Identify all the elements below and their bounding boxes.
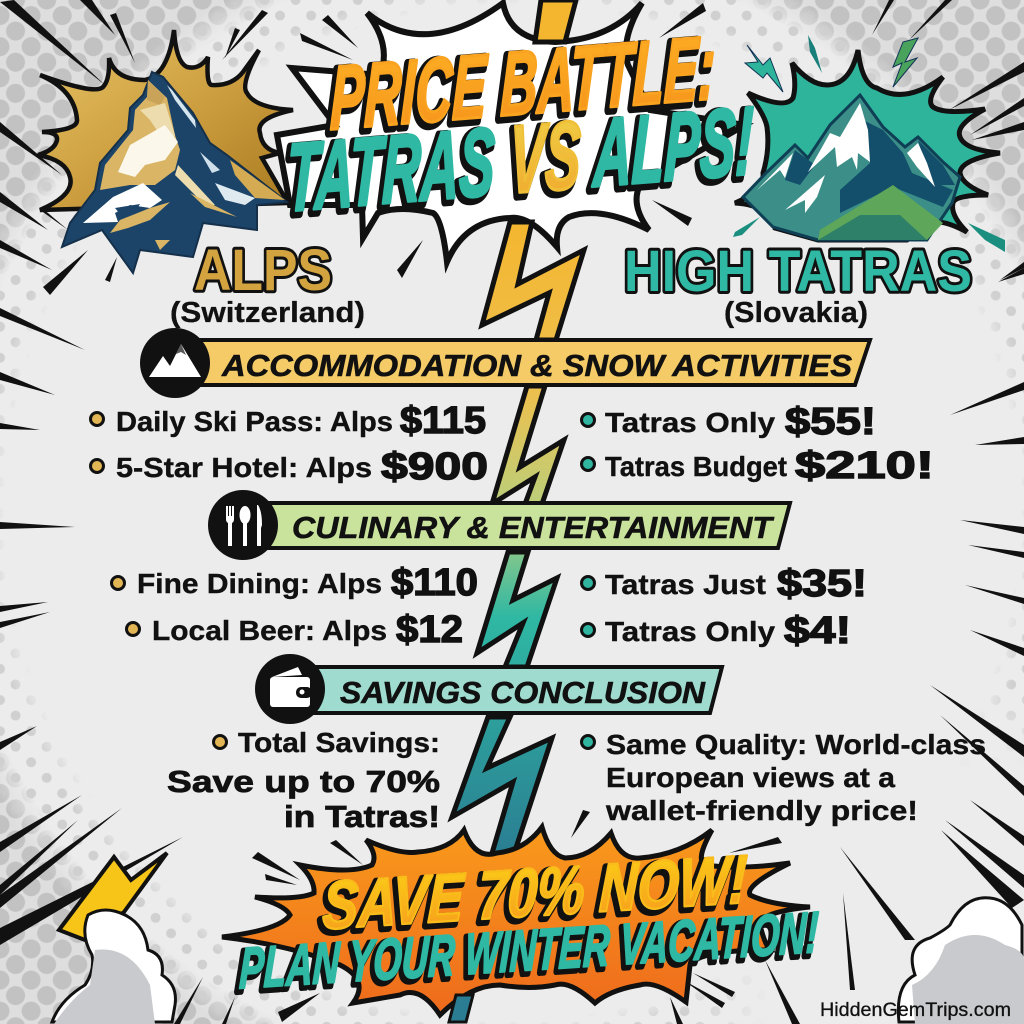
- icon: wallet: [270, 667, 312, 707]
- panel: accommodation prices: Tatras Budget: [605, 451, 787, 482]
- central lightning bolt: [452, 0, 584, 860]
- panel: savings text Alps side: [167, 727, 440, 834]
- banner: savings conclusion: SAVINGS CONCLUSION: [340, 675, 706, 710]
- panel: savings text Alps side: Save up to 70%: [167, 764, 440, 799]
- call to action text: SAVE 70% NOW!: [318, 844, 745, 947]
- panel: call-to-action burst: [222, 827, 810, 1022]
- call to action text: SAVE 70% NOW!: [321, 841, 749, 944]
- panel: culinary prices: $110: [391, 562, 478, 604]
- panel: accommodation prices: $210!: [795, 445, 934, 487]
- heading: High Tatras: [624, 239, 972, 329]
- banner: savings conclusion: [255, 654, 722, 724]
- title: [282, 14, 756, 235]
- panel: culinary prices: $35!: [777, 563, 867, 605]
- panel: savings text Tatras side: wallet-friendly price!: [605, 795, 918, 826]
- icon: right storm cloud: [898, 898, 1024, 1024]
- panel: culinary prices: $12: [396, 609, 463, 651]
- panel: culinary prices: $4!: [784, 610, 851, 652]
- panel: culinary prices: Local Beer: Alps: [152, 615, 387, 646]
- panel: culinary prices: Tatras Just: [605, 569, 766, 600]
- small lightning bolts and ticks: [733, 35, 1024, 280]
- banner: accommodation and snow activities: [140, 328, 870, 398]
- call to action text: [235, 837, 822, 1005]
- panel: accommodation prices: [90, 400, 934, 488]
- heading: Alps: (Switzerland): [170, 297, 365, 329]
- heading: Alps: ALPS: [194, 238, 332, 303]
- panel: accommodation prices: $900: [381, 446, 488, 488]
- panel: accommodation prices: $55!: [785, 401, 876, 443]
- icon: mountains: [149, 344, 201, 377]
- website credit: HiddenGemTrips.com: [820, 1000, 1011, 1021]
- banner: culinary and entertainment: CULINARY & ENTERTAINMENT: [292, 510, 775, 545]
- panel: accommodation prices: 5-Star Hotel: Alps: [116, 452, 372, 483]
- icon: Alps mountain badge: [38, 30, 293, 273]
- panel: savings text Alps side: Total Savings:: [238, 727, 440, 758]
- panel: savings text Tatras side: Same Quality: World-class: [606, 729, 986, 760]
- panel: accommodation prices: $115: [400, 400, 486, 442]
- heading: Alps: [170, 238, 365, 329]
- title: PRICE BATTLE:: [326, 20, 713, 153]
- bolt tail: [449, 995, 473, 1022]
- panel: savings text Tatras side: [582, 729, 986, 826]
- panel: savings text Tatras side: European views at a: [606, 762, 895, 793]
- panel: savings text Alps side: in Tatras!: [284, 799, 440, 834]
- panel: culinary prices: Tatras Only: [605, 616, 775, 647]
- banner: accommodation and snow activities: ACCOMMODATION & SNOW ACTIVITIES: [221, 348, 852, 383]
- panel: accommodation prices: Tatras Only: [605, 407, 775, 438]
- icon: cutlery: [226, 505, 262, 546]
- icon: left storm cloud with lightning: [52, 853, 175, 1024]
- heading: High Tatras: HIGH TATRAS: [624, 239, 972, 304]
- panel: culinary prices: Fine Dining: Alps: [137, 568, 382, 599]
- panel: title burst: [277, 3, 745, 262]
- panel: accommodation prices: Daily Ski Pass: Alps: [116, 406, 393, 437]
- title: TATRAS VS ALPS!: [285, 87, 755, 232]
- icon: Tatras mountain badge: [735, 50, 1000, 240]
- heading: High Tatras: (Slovakia): [724, 297, 868, 329]
- banner: culinary and entertainment: [208, 490, 790, 560]
- panel: culinary prices: [112, 562, 867, 652]
